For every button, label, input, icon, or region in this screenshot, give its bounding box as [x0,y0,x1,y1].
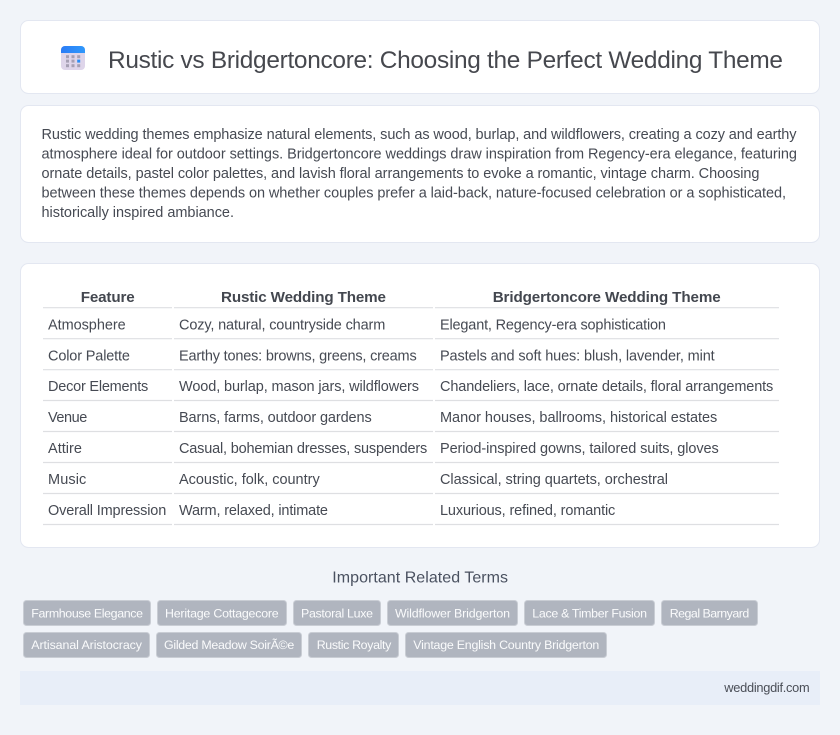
tag: Artisanal Aristocracy [31,638,143,652]
table row: venue: Manor houses, ballrooms, historical estates [440,410,717,426]
tag: Pastoral Luxe [301,606,373,620]
table row: color palette: Pastels and soft hues: blush, lavender, mint [440,348,715,364]
table row: attire: Casual, bohemian dresses, suspenders [179,441,427,457]
tag [294,600,380,626]
table row: atmosphere [43,317,779,339]
table row: venue: Venue [48,410,87,426]
table row: attire: Attire [48,441,82,457]
heading: important related terms: Important Related Terms [332,570,508,587]
table row: music [43,472,779,494]
tag: Gilded Meadow SoirÃ©e [164,638,294,652]
table row: decor elements: Chandeliers, lace, ornate details, floral arrangements [440,379,773,395]
table row: color palette [43,348,779,370]
text block: intro paragraph: atmosphere ideal for outdoor settings. Bridgertoncore weddings draw inspiration from Regency-era elegance, featuring [42,146,797,162]
icon: calendar [61,46,85,70]
tag [308,632,398,658]
table row: overall impression: Overall Impression [48,503,166,519]
tag: Regal Barnyard [670,606,749,620]
tag [158,600,286,626]
table row: overall impression: Luxurious, refined, romantic [440,503,615,519]
table row: atmosphere: Cozy, natural, countryside charm [179,317,385,333]
tag: Rustic Royalty [317,638,392,652]
tag: Farmhouse Elegance [31,606,143,620]
table row: music: Acoustic, folk, country [179,472,320,488]
table row: color palette: Earthy tones: browns, greens, creams [179,348,417,364]
title: Rustic vs Bridgertoncore: Choosing the Perfect Wedding Theme [108,47,783,74]
tag: Wildflower Bridgerton [395,606,510,620]
table row: color palette: Color Palette [48,348,130,364]
table row: decor elements: Decor Elements [48,379,148,395]
table row: attire [43,441,779,462]
tag [388,600,518,626]
tag [156,632,302,658]
tag [406,632,606,658]
table row: atmosphere: Atmosphere [48,317,126,333]
table header row: Rustic Wedding Theme [221,289,386,306]
table row: atmosphere: Elegant, Regency-era sophistication [440,317,666,333]
table row: music: Music [48,472,86,488]
tag [524,600,654,626]
table row: attire: Period-inspired gowns, tailored suits, gloves [440,441,719,457]
tag: Vintage English Country Bridgerton [413,638,599,652]
tag: Heritage Cottagecore [165,606,279,620]
tag: Lace & Timber Fusion [532,606,647,620]
tag [662,600,758,626]
table header row: Feature [81,289,135,306]
text block: intro paragraph: historically inspired ambiance. [42,205,234,221]
footer source text: weddingdif.com [723,680,810,695]
table header row: Bridgertoncore Wedding Theme [493,289,721,306]
tag [24,632,150,658]
footer [20,671,820,705]
table row: overall impression [43,503,779,524]
table row: decor elements: Wood, burlap, mason jars, wildflowers [179,379,419,395]
tag list: related terms [24,600,758,658]
table row: venue [43,410,779,432]
text block: intro paragraph [42,127,797,221]
tag [24,600,150,626]
table row: decor elements [43,379,779,400]
panel: comparison table [20,264,820,548]
table row: music: Classical, string quartets, orchestral [440,472,668,488]
text block: intro paragraph: Rustic wedding themes emphasize natural elements, such as wood, burlap, and wildflowers, creating a cozy and earthy [42,127,797,143]
table header row [43,289,779,308]
table row: overall impression: Warm, relaxed, intimate [179,503,328,519]
panel: introduction [20,106,820,242]
text block: intro paragraph: ornate details, pastel color palettes, and lavish floral arrangements to evoke a romantic, vintage charm. Choosing [42,166,760,182]
text block: intro paragraph: between these themes depends on whether couples prefer a laid-back, nature-focused celebration or a sophisticated, [42,186,786,202]
table row: venue: Barns, farms, outdoor gardens [179,410,372,426]
panel: header [20,20,820,94]
